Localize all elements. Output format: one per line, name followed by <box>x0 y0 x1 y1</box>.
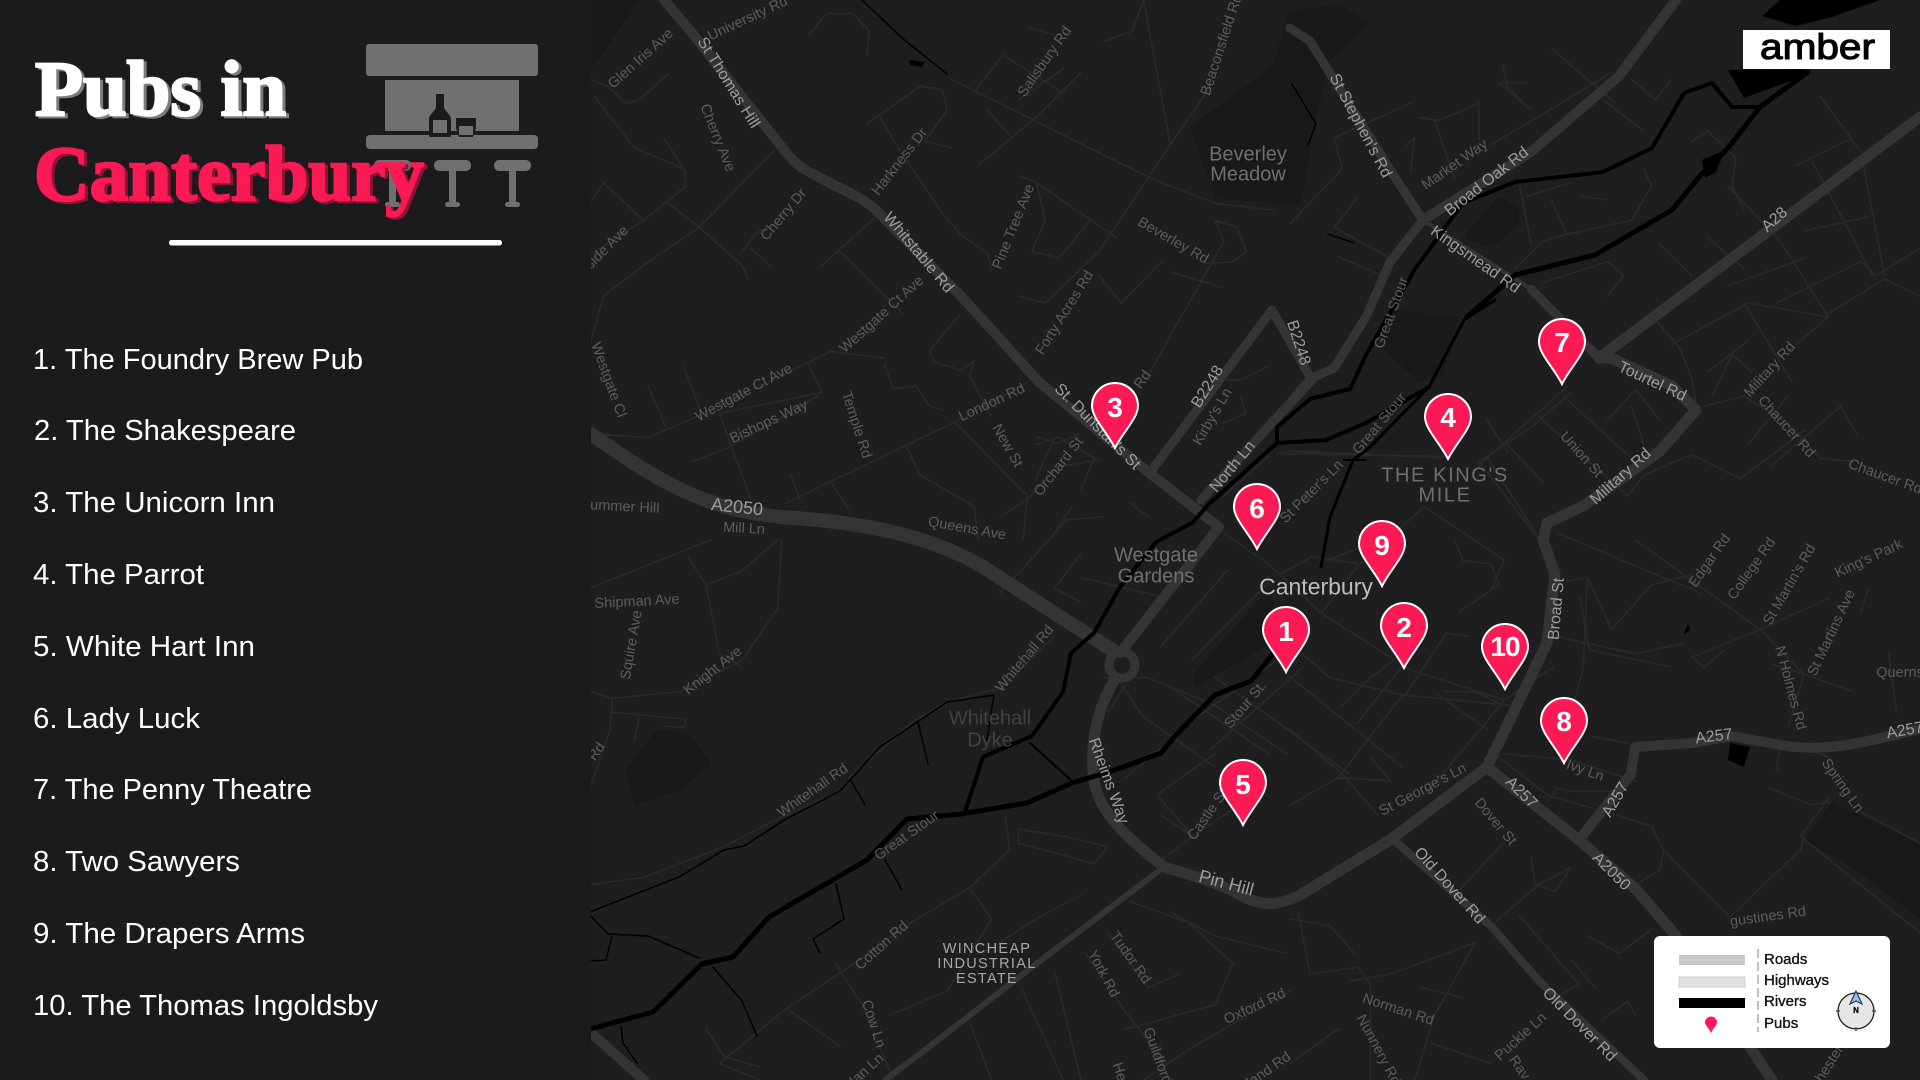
major roads <box>590 0 1920 1080</box>
minor road labels: Westgate Ct Ave <box>693 361 795 425</box>
area labels: WINCHEAP <box>943 941 1031 957</box>
minor road labels <box>568 0 1920 1080</box>
pin 2: 2 <box>1396 612 1412 643</box>
minor road labels: Stour St. <box>1222 678 1270 732</box>
minor road labels: Pine Tree Ave <box>990 182 1038 272</box>
pin 10: 10 <box>1490 631 1520 662</box>
major road labels: B2248 <box>1283 318 1314 368</box>
title underline <box>169 240 502 246</box>
pub list: 8. Two Sawyers <box>33 846 240 878</box>
minor road labels: Ivy Ln <box>1564 757 1606 785</box>
pub list: 9. The Drapers Arms <box>33 918 305 950</box>
major road labels: Tourtel Rd <box>1615 359 1689 405</box>
minor road labels: Beverley Rd <box>1135 214 1211 268</box>
legend <box>1654 936 1890 1048</box>
title <box>34 45 424 217</box>
minor road labels: Castle St <box>1184 786 1231 844</box>
pin 3: 3 <box>1107 392 1123 423</box>
major road labels: A2050 <box>710 494 764 519</box>
major road labels: Pin Hill <box>1197 866 1256 900</box>
minor road labels: Glen Iris Ave <box>605 26 677 92</box>
minor road labels: York Rd <box>1084 948 1122 1000</box>
major road labels: A257 <box>1599 779 1633 820</box>
minor road labels: Shipman Ave <box>594 592 680 612</box>
minor road labels: Whitehall Rd <box>775 761 851 821</box>
minor road labels: Cherry Ave <box>696 102 738 174</box>
minor road labels: Squire Ave <box>618 609 646 681</box>
minor road labels: Tudor Rd <box>1106 929 1154 987</box>
minor road labels: London Rd <box>956 381 1027 425</box>
map pins <box>1092 319 1587 825</box>
minor road labels: Great Stour <box>1372 275 1412 351</box>
minor road labels: Orchard St <box>1031 434 1087 499</box>
area labels: Beverley <box>1209 143 1287 165</box>
pub list <box>33 344 378 1022</box>
pin 2 <box>1381 603 1427 668</box>
title: Canterbury <box>34 130 424 217</box>
minor road labels: Cherry Dr <box>758 186 810 244</box>
major road labels: Military Rd <box>1587 445 1655 508</box>
minor road labels: Cow Ln <box>858 998 888 1050</box>
major road labels: A257 <box>1694 726 1734 747</box>
title: Pubs in <box>35 45 286 132</box>
area labels: MILE <box>1418 484 1472 506</box>
major road labels: A2050 <box>1589 849 1634 894</box>
pin 10 <box>1482 624 1528 689</box>
icon: bottle <box>429 94 451 137</box>
pin 3 <box>1092 383 1138 448</box>
minor road labels: Edgar Rd <box>1686 531 1734 591</box>
pin 8: 8 <box>1556 706 1572 737</box>
legend labels: Roads <box>1764 951 1807 968</box>
minor road labels: Knight Ave <box>681 643 745 698</box>
pin 7: 7 <box>1554 327 1570 358</box>
icon: stools <box>374 160 531 207</box>
major road labels: Rheims Way <box>1085 736 1132 826</box>
pin 4: 4 <box>1440 402 1456 433</box>
area labels: THE KING'S <box>1381 464 1509 486</box>
minor road labels: St Peter's Ln <box>1277 457 1347 527</box>
logo: amber: amber <box>1760 26 1875 67</box>
pub list: 2. The Shakespeare <box>34 415 296 447</box>
icon: glass <box>456 118 476 137</box>
pin 9: 9 <box>1374 530 1390 561</box>
minor road labels: Mill Ln <box>723 520 765 538</box>
minor road labels: Oxford Rd <box>1222 986 1288 1028</box>
minor road labels: Whitehall Rd <box>992 622 1057 696</box>
area labels: Westgate <box>1114 544 1198 566</box>
major road labels: St Stephen's Rd <box>1326 71 1395 181</box>
minor road labels: Westgate Ct Ave <box>837 273 927 357</box>
pub list: 6. Lady Luck <box>33 703 200 735</box>
major road labels: A257 <box>1502 774 1540 812</box>
minor road labels: Rd <box>585 740 609 764</box>
minor road labels: Cotton Rd <box>852 918 912 974</box>
area labels: Dyke <box>967 729 1013 751</box>
minor road labels: Market Way <box>1419 136 1492 193</box>
legend labels: Pubs <box>1764 1015 1798 1032</box>
legend labels: Highways <box>1764 972 1829 989</box>
pub list: 7. The Penny Theatre <box>33 774 312 806</box>
major road labels: Whitstable Rd <box>880 209 957 296</box>
minor road labels: Queens Ave <box>927 514 1007 544</box>
minor road labels: Great Stour <box>872 808 942 864</box>
legend swatch: highways <box>1679 977 1745 987</box>
major road labels: Broad Oak Rd <box>1442 144 1532 220</box>
major road labels: Old Dover Rd <box>1410 844 1488 928</box>
minor road labels: St George's Ln <box>1377 760 1469 820</box>
pin 7 <box>1539 319 1585 384</box>
rivers <box>590 0 1880 1063</box>
pin 9 <box>1359 521 1405 586</box>
pin 1 <box>1263 607 1309 672</box>
minor road labels: Union St <box>1557 429 1606 481</box>
major road labels: Old Dover Rd <box>1539 985 1619 1065</box>
minor road labels: Westgate Cl <box>587 340 629 420</box>
pub list: 1. The Foundry Brew Pub <box>33 344 363 376</box>
minor road labels: Summer Hill <box>580 497 660 517</box>
minor road labels: Chaucer Rd <box>1754 393 1818 461</box>
minor road labels: College Rd <box>1725 535 1779 603</box>
pin 5: 5 <box>1235 769 1251 800</box>
major road labels: A28 <box>1759 204 1791 236</box>
minor road labels: Salisbury Rd <box>1015 24 1075 100</box>
area labels: Whitehall <box>949 707 1031 729</box>
area labels: INDUSTRIAL <box>937 956 1037 972</box>
pin 4 <box>1425 394 1471 459</box>
major road labels <box>694 34 1920 1065</box>
major road labels: North Ln <box>1207 438 1259 496</box>
minor road labels: Kirby's Ln <box>1190 386 1236 448</box>
icon: compass: N <box>1853 1006 1859 1015</box>
major road labels: St Thomas Hill <box>694 34 763 131</box>
minor road labels: Forty Acres Rd <box>1033 268 1097 358</box>
minor road labels: Great Stour <box>1350 390 1410 458</box>
minor road labels: Military Rd <box>1741 339 1799 401</box>
icon: compass <box>1836 991 1876 1031</box>
pub list: 5. White Hart Inn <box>33 631 255 663</box>
pub list: 10. The Thomas Ingoldsby <box>33 990 378 1022</box>
minor road labels: Dover St <box>1471 795 1519 849</box>
panel: sidebar <box>0 0 591 1080</box>
minor road labels: New St <box>989 422 1026 470</box>
minor road labels: Harkness Dr <box>869 125 931 199</box>
minor road labels: St Martin's Rd <box>1760 542 1819 628</box>
pin 5 <box>1220 760 1266 825</box>
area labels: Gardens <box>1118 565 1194 587</box>
legend swatch: rivers <box>1679 998 1745 1008</box>
minor road labels: Norman Rd <box>1360 991 1436 1029</box>
minor streets <box>590 0 1920 1080</box>
minor road labels: St Martins Ave <box>1805 587 1859 679</box>
minor road labels: Spring Ln <box>1818 756 1866 816</box>
area labels: Meadow <box>1210 163 1286 185</box>
area labels <box>937 143 1509 987</box>
pin 6 <box>1234 484 1280 549</box>
legend labels <box>1764 951 1829 1032</box>
major road labels: B2248 <box>1188 363 1227 411</box>
minor road labels: Rd <box>1131 368 1155 392</box>
major road labels: St. Dunstan's St <box>1051 380 1144 474</box>
major road labels: Canterbury <box>1259 574 1373 600</box>
minor road labels: Temple Rd <box>838 390 874 460</box>
major road labels: Broad St <box>1546 577 1568 641</box>
major road labels: Kingsmead Rd <box>1427 223 1523 297</box>
minor road labels: Puckle Ln <box>1492 1010 1550 1064</box>
pin 8 <box>1541 698 1587 763</box>
pin 1: 1 <box>1278 616 1294 647</box>
legend labels: Rivers <box>1764 993 1807 1010</box>
parks and dark land areas <box>591 0 1920 919</box>
pub list: 4. The Parrot <box>33 559 204 591</box>
pin 6: 6 <box>1249 493 1265 524</box>
minor road labels: N Holmes Rd <box>1771 644 1809 732</box>
minor road labels: King's Park <box>1833 536 1906 581</box>
legend swatch: roads <box>1679 955 1745 965</box>
minor road labels: gustines Rd <box>1729 904 1807 930</box>
minor road labels: Hillside Ave <box>568 223 632 287</box>
icon: pub bar <box>366 44 538 207</box>
pub list: 3. The Unicorn Inn <box>33 487 275 519</box>
legend swatch: pub pin <box>1705 1016 1717 1033</box>
area labels: ESTATE <box>956 971 1018 987</box>
logo: amber <box>1743 26 1890 69</box>
minor road labels: Bishops Way <box>727 397 811 447</box>
